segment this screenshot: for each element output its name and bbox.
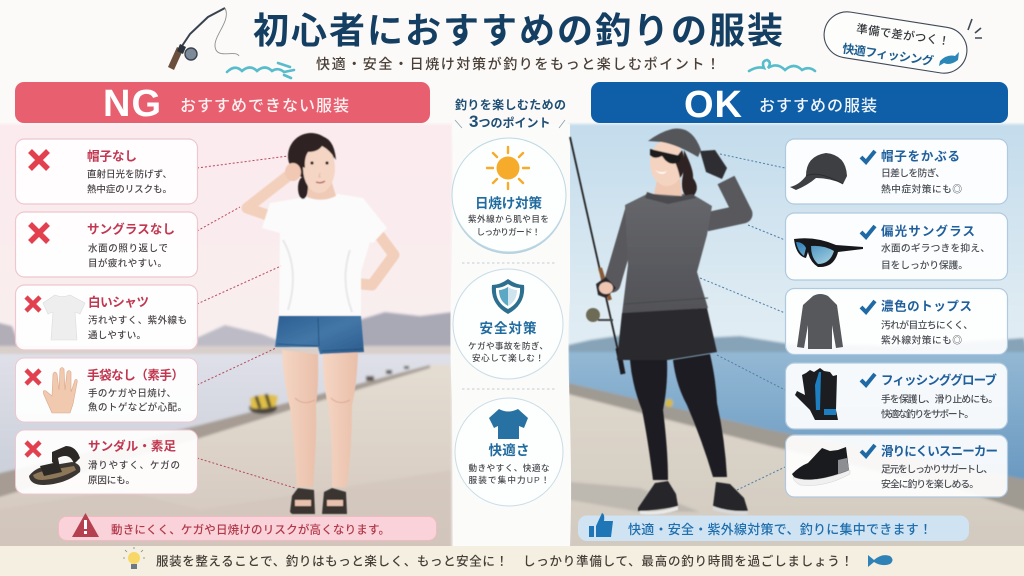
OK card: dark top: 紫外線対策にも◎	[881, 334, 962, 346]
OK card: fishing gloves: 手を保護し、滑り止めにも。	[881, 392, 998, 406]
OK header: OK	[684, 84, 743, 126]
hand on hip	[339, 279, 359, 291]
subtitle: 快適・安全・日焼け対策が釣りをもっと楽しむポイント！	[316, 56, 720, 72]
NG header: NG	[103, 83, 161, 125]
center heading: 釣りを楽しむための	[455, 97, 566, 112]
OK card: sneakers: 安全に釣りを楽しめる。	[881, 478, 979, 490]
leader lines NG	[197, 156, 295, 488]
cap	[648, 128, 701, 157]
shoes	[638, 481, 678, 511]
OK card: cap: 帽子をかぶる	[881, 148, 960, 164]
icon: glove	[795, 368, 838, 420]
point: sun protection: 日焼け対策	[475, 195, 542, 211]
point: safety: ケガや事故を防ぎ、	[468, 340, 548, 351]
NG card: no gloves: 手袋なし（素手）	[87, 368, 184, 382]
NG card: no hat: 帽子なし	[87, 148, 137, 164]
hand at ear	[285, 163, 301, 181]
point: sun protection: 紫外線から肌や目を	[468, 213, 549, 224]
NG card: sandals: 原因にも。	[88, 476, 135, 486]
icon: left wave	[227, 63, 294, 78]
icon: polarized sunglasses	[794, 238, 863, 267]
NG header: おすすめできない服装	[180, 97, 349, 115]
icon: fishing rod	[168, 8, 239, 70]
point: comfort: 服装で集中力UP！	[468, 474, 550, 485]
OK card: sneakers: 足元をしっかりサガートし、	[881, 464, 993, 476]
icon: check	[861, 374, 875, 385]
t-shirt	[262, 194, 387, 315]
OK message bar: 快適・安全・紫外線対策で、釣りに集中できます！	[628, 522, 932, 537]
icon: sun	[487, 147, 529, 189]
NG card: no hat: 直射日光を防げず、	[87, 168, 172, 180]
NG card: white shirt: 白いシャツ	[88, 294, 149, 310]
icon: blue shirt	[489, 409, 528, 439]
point: comfort: 快適さ	[488, 442, 530, 458]
neck	[654, 176, 682, 196]
left leg	[282, 350, 318, 487]
icon: bare hand	[43, 368, 77, 413]
NG card: no gloves: 魚のトゲなどが心配。	[88, 402, 187, 414]
shorts	[617, 308, 717, 360]
shorts	[275, 316, 364, 354]
NG warning bar: 動きにくく、ケガや日焼けのリスクが高くなります。	[111, 522, 390, 536]
point: comfort: 動きやすく、快適な	[468, 462, 550, 473]
icon: check	[861, 445, 875, 456]
OK card: fishing gloves: 快適な釣りをサポート。	[881, 408, 974, 420]
OK message bar	[578, 513, 969, 541]
face	[303, 143, 335, 193]
photo background: NG side	[0, 124, 452, 548]
raised arm	[247, 176, 288, 216]
NG card: no gloves	[16, 358, 198, 422]
OK card: dark top	[786, 288, 1008, 354]
OK header	[591, 82, 1008, 126]
icon: thumbs up	[589, 513, 613, 537]
OK card: fishing gloves: フィッシンググローブ	[881, 372, 997, 388]
icon: cap	[790, 153, 847, 190]
footer strip: 服装を整えることで、釣りはもっと楽しく、もっと安全に！	[156, 554, 508, 568]
OK card: cap: 日差しを防ぎ、	[881, 166, 945, 180]
center heading: 3つのポイント	[469, 112, 550, 131]
OK card: sunglasses	[786, 213, 1008, 280]
point: safety	[453, 269, 563, 379]
NG card: no hat	[16, 139, 198, 204]
sleeve arms	[612, 212, 633, 284]
OK card: cap: 熱中症対策にも◎	[881, 182, 962, 196]
point: comfort	[455, 398, 563, 506]
NG warning bar	[58, 513, 436, 540]
NG card: no sunglasses	[16, 212, 198, 277]
OK header: おすすめの服装	[759, 97, 877, 115]
NG card: white shirt	[16, 285, 198, 350]
OK card: dark top: 濃色のトップス	[881, 298, 972, 314]
hair and ponytail	[682, 150, 697, 199]
icon: sandal	[29, 446, 80, 485]
icon: light bulb	[123, 547, 145, 569]
icon: hoodie	[797, 294, 843, 349]
icon: shield	[492, 279, 524, 314]
badge: quick fishing: 準備で差がつく！	[855, 22, 951, 48]
right leg	[323, 352, 358, 487]
neck	[307, 180, 336, 200]
icon: check	[861, 151, 875, 162]
panel: center column background	[450, 124, 571, 546]
figure: woman in OK outfit	[570, 128, 748, 515]
icon: right wave	[749, 60, 815, 71]
OK card: dark top: 汚れが目立ちにくく、	[881, 318, 973, 332]
center heading	[455, 97, 566, 131]
OK card: sunglasses: 偏光サングラス	[881, 224, 975, 238]
NG card: no sunglasses: 水面の照り返しで	[88, 242, 168, 254]
NG card: white shirt: 通しやすい。	[88, 330, 146, 342]
title: 初心者におすすめの釣りの服装	[253, 10, 783, 51]
hood	[645, 192, 696, 204]
NG card: no sunglasses: サングラスなし	[87, 222, 175, 236]
point: safety: 安全対策	[480, 320, 537, 336]
hoodie body	[622, 194, 712, 314]
badge: quick fishing: 快適フィッシング	[841, 41, 935, 68]
OK card: fishing gloves	[786, 363, 1008, 429]
leader lines OK	[700, 154, 785, 490]
OK card: cap	[786, 139, 1008, 204]
hair back and ponytail	[288, 133, 334, 179]
icon: warning triangle	[72, 513, 99, 537]
NG header	[15, 82, 430, 125]
left glove and hand	[596, 277, 616, 298]
face	[650, 140, 684, 186]
fishing rod	[570, 137, 623, 373]
photo background: OK side	[568, 124, 1024, 548]
point: safety: 安心して楽しむ！	[472, 352, 544, 363]
NG card: no hat: 熱中症のリスクも。	[87, 184, 172, 196]
right arm	[350, 236, 394, 285]
icon: fish	[868, 555, 892, 567]
icon: sneaker	[792, 447, 850, 486]
figure: woman in NG outfit	[247, 133, 394, 514]
raised glove	[700, 150, 727, 179]
icon: white t-shirt	[43, 295, 85, 340]
point: sun protection: しっかりガード！	[476, 226, 540, 237]
NG card: sandals	[16, 430, 198, 494]
leggings	[630, 360, 668, 480]
bangs	[301, 136, 336, 168]
NG card: no gloves: 手のケガや日焼け、	[88, 388, 176, 400]
sunglasses	[650, 149, 681, 164]
footer strip	[0, 546, 1024, 576]
icon: check	[861, 226, 875, 237]
badge: quick fishing	[821, 9, 982, 76]
icon: check	[861, 301, 875, 312]
OK card: sneakers	[786, 435, 1008, 497]
OK card: sneakers: 滑りにくいスニーカー	[881, 444, 998, 458]
NG card: sandals: サンダル・素足	[88, 438, 176, 454]
NG card: sandals: 滑りやすく、ケガの	[88, 460, 180, 472]
sandals	[290, 488, 347, 514]
OK card: sunglasses: 目をしっかり保護。	[881, 258, 968, 272]
OK card: sunglasses: 水面のギラつきを抑え、	[881, 242, 990, 254]
divider dots	[462, 263, 555, 389]
NG card: no sunglasses: 目が疲れやすい。	[88, 258, 167, 270]
point: sun protection	[452, 138, 566, 254]
footer strip: しっかり準備して、最高の釣り時間を過ごしましょう！	[523, 554, 853, 568]
NG card: white shirt: 汚れやすく、紫外線も	[88, 314, 187, 326]
